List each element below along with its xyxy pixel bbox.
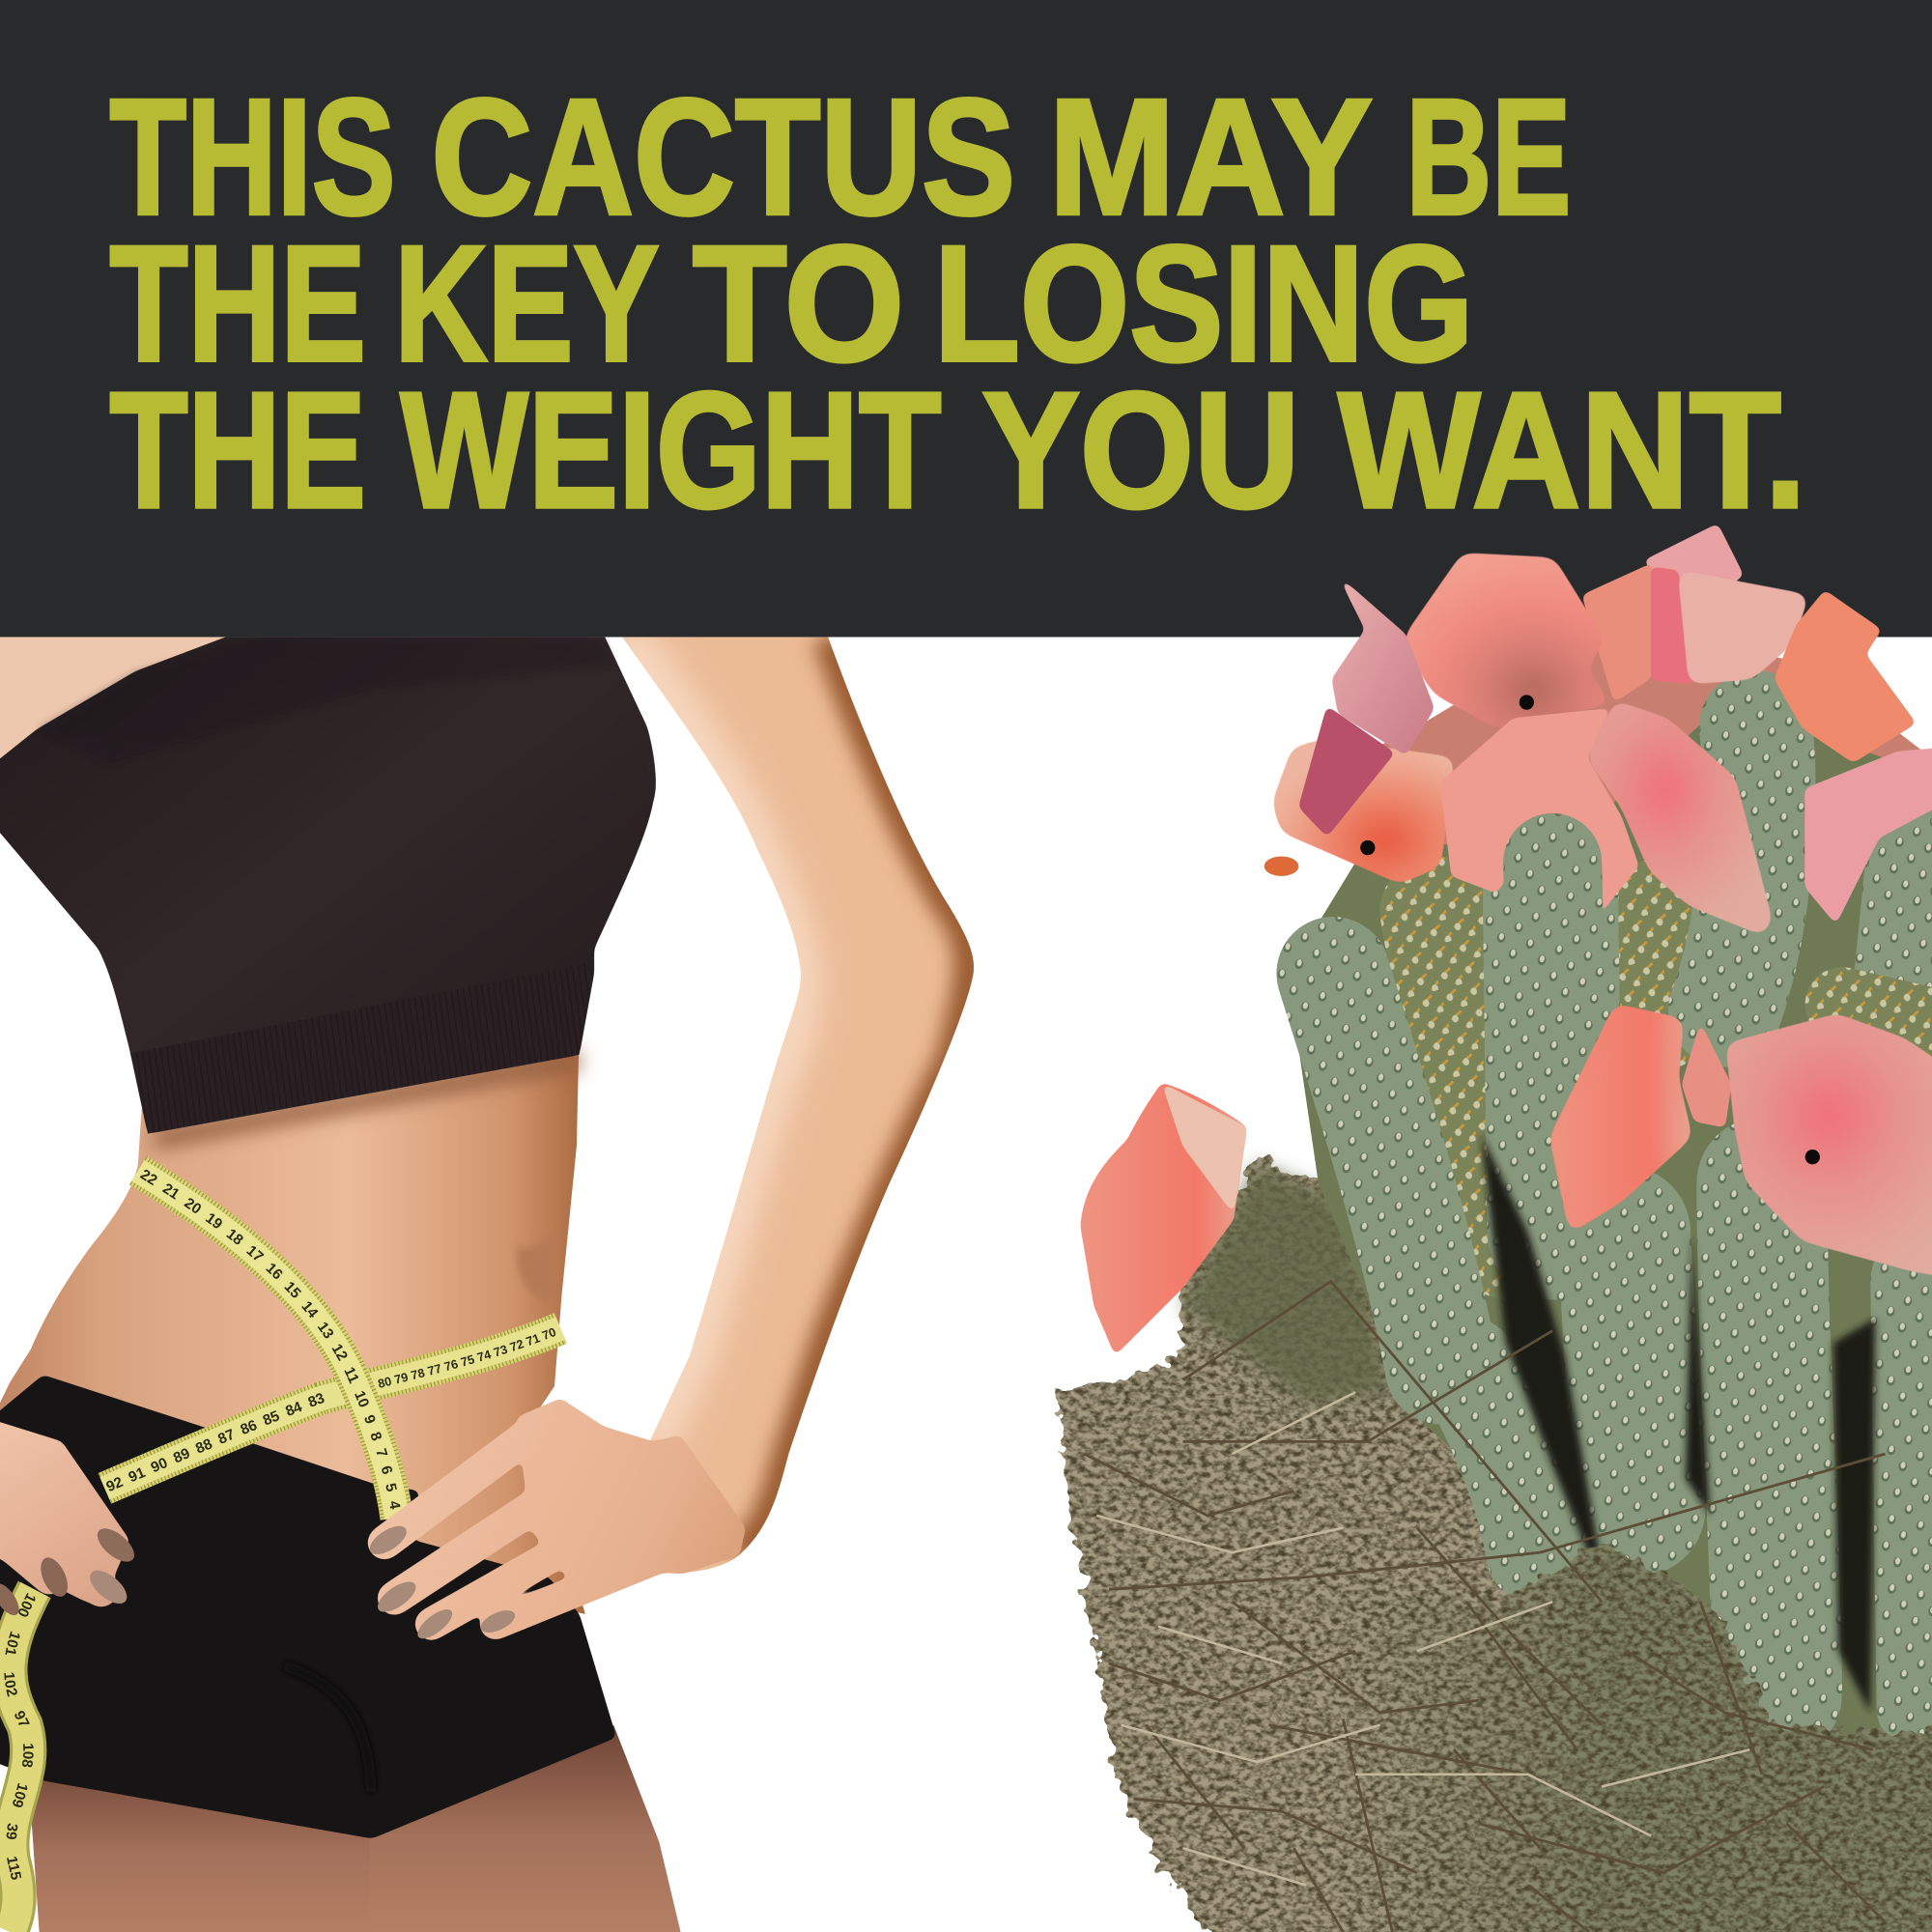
flower eye [1520,695,1534,710]
title: YOU [982,358,1300,543]
shorts [0,1375,616,1838]
left hand [0,1410,129,1602]
flower backdrop [1343,616,1932,936]
flower eye [1360,840,1375,855]
title: WANT. [1338,358,1806,543]
left shoulder [0,638,226,759]
tape: hanging twist [0,1580,51,1932]
flower: mauve petal [1332,576,1435,755]
small shrub [1182,1164,1392,1405]
tape numbers: waist, right part: 80 79 78 77 76 75 74 73 72 71 70 [378,1327,555,1387]
left thigh [31,1780,370,1932]
title: TO [693,212,904,396]
flower: centre cup [1440,708,1638,912]
shorts leg fold [285,1665,371,1792]
tape: diagonal strip [129,1156,412,1520]
flower: lower small petal [1682,1023,1731,1127]
flower: far left [1081,1083,1247,1355]
crop top [0,604,656,1133]
title: THIS [110,65,395,249]
brush at the base [1057,1158,1932,1932]
dark gaps [1481,1133,1875,1713]
twigs [1084,1282,1886,1932]
tape numbers: twist: 100 101 102 97 108 109 39 115 [4,1593,35,1880]
arm [616,629,985,1589]
photo: woman measuring her waist [0,638,974,1932]
tape: waist strip [99,1313,567,1504]
tape numbers: diagonal: 22 21 20 19 18 17 16 15 14 13 12 11 10 9 8 7 6 5 4 3 [139,1169,400,1509]
nails [0,1520,518,1644]
title: WEIGHT [401,358,941,543]
title: THE [110,212,366,396]
photo: flowering hoodia cactus [1057,524,1932,1932]
small orange bud [1264,856,1298,876]
flower: left [1273,706,1454,884]
tape numbers: waist, left part: 92 91 90 89 88 87 86 85 84 83 [106,1393,325,1492]
title [110,65,1806,543]
right hand [384,1399,746,1624]
right thigh [370,1725,690,1932]
title: KEY [394,212,659,396]
crop top upper band [36,638,616,730]
centre stem top [1552,863,1555,961]
torso [0,1035,585,1614]
flower: top centre [1406,554,1610,728]
navel [516,1243,547,1298]
title: BE [1406,65,1571,249]
flower: lower right [1726,1014,1932,1282]
title: CACTUS [431,65,1015,249]
flower: centre right petal [1587,701,1772,935]
lower brush over stem bases [1331,1540,1932,1932]
light twigs [1096,1392,1749,1886]
crop top hem [130,963,594,1133]
flower: top right [1582,524,1916,763]
dark title band [0,0,1932,637]
flower: lower left petal [1550,1005,1691,1234]
title: THE [110,358,366,543]
title: MAY [1048,65,1373,249]
cactus mass backdrop [1288,702,1932,1737]
flower eye [1805,1150,1820,1164]
flower: right middle [1805,746,1932,924]
cactus stems [1333,727,1928,1707]
title: LOSING [934,212,1474,396]
